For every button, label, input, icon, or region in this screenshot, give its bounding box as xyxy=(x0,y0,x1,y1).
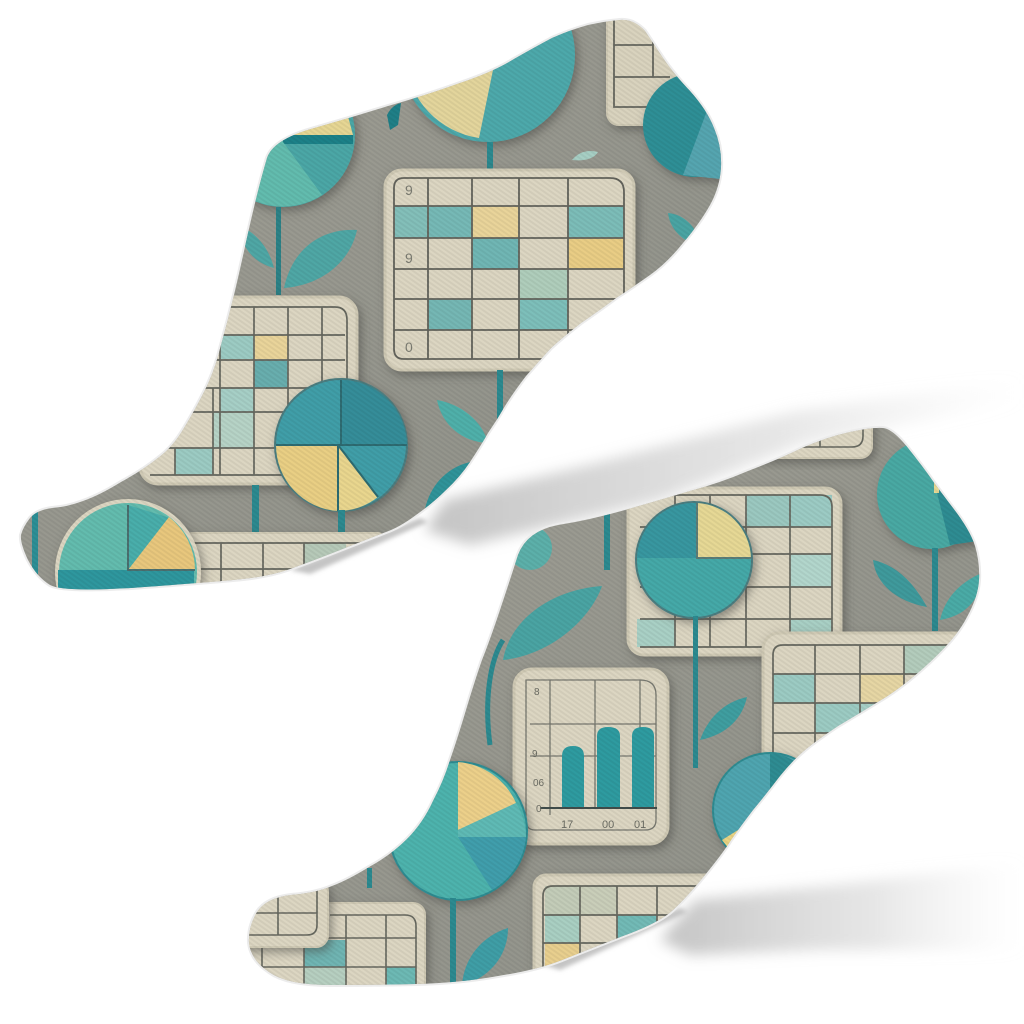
stem under centre calendar xyxy=(497,370,503,420)
floor shadow of upper sock xyxy=(290,378,1024,574)
pie chart: lower right xyxy=(713,753,827,867)
pie chart: toe xyxy=(54,498,210,590)
pie fragment at cuff xyxy=(515,530,552,570)
stem and leaves: upper left xyxy=(240,207,357,295)
calendar: bottom left xyxy=(250,903,425,1003)
leaf: right of centre calendar xyxy=(668,213,694,240)
stem: top centre pie xyxy=(487,142,493,170)
bar chart panel: 00 xyxy=(602,819,614,831)
stem: upper centre pie xyxy=(693,616,698,768)
stem at toe xyxy=(32,508,38,575)
leaf: large left xyxy=(488,586,602,745)
sock fabric xyxy=(248,428,980,985)
calendar: centre: 9 xyxy=(405,250,413,266)
stem under centre left pie xyxy=(338,510,345,532)
bar chart panel: 0 xyxy=(536,804,542,815)
pie chart: top right xyxy=(877,439,987,549)
calendar: top right corner xyxy=(607,0,687,125)
leaf: bottom centre xyxy=(462,928,508,985)
calendar: bottom xyxy=(186,532,383,584)
bar chart panel xyxy=(514,669,668,844)
floor shadow of lower sock xyxy=(540,862,1024,970)
pie chart: top centre xyxy=(410,28,582,150)
bar chart panel: 06 xyxy=(533,778,545,789)
sock outline xyxy=(21,20,721,589)
calendar: centre: 9 xyxy=(405,182,413,198)
stem: lower left pie xyxy=(450,898,456,988)
pie chart: upper left xyxy=(254,116,362,216)
stem under left calendar xyxy=(252,485,259,532)
sock outline xyxy=(249,428,979,985)
leaf smudge above centre calendar xyxy=(572,151,598,160)
calendar: upper centre xyxy=(628,488,841,655)
leaf: bottom right of upper sock xyxy=(425,462,470,508)
axis xyxy=(540,807,657,809)
bar chart panel: 8 xyxy=(534,687,540,698)
pie chart: centre left xyxy=(275,379,407,511)
small stem near toe xyxy=(367,868,372,888)
sock fabric xyxy=(20,20,722,590)
bar chart panel: 9 xyxy=(532,749,538,760)
pie chart: upper right xyxy=(640,76,722,187)
leaf: centre right xyxy=(700,697,747,740)
sock: upper left xyxy=(19,18,723,592)
bar chart panel: 01 xyxy=(634,819,646,831)
stem: top left xyxy=(604,510,610,570)
calendar: centre xyxy=(385,170,634,370)
pie chart: lower left xyxy=(389,762,527,900)
leaf: centre xyxy=(437,400,488,443)
calendar: left xyxy=(140,297,357,484)
calendar: bottom centre xyxy=(534,875,724,1000)
sock: lower right xyxy=(247,426,981,987)
bars xyxy=(562,746,584,807)
pie chart: upper centre xyxy=(636,502,752,618)
calendar: centre: 0 xyxy=(405,339,413,355)
small stem near top edge xyxy=(387,103,401,130)
axis labels: 17 xyxy=(561,819,573,831)
calendar: top xyxy=(759,428,880,468)
calendar: right xyxy=(758,630,958,788)
stem and leaves: top right xyxy=(873,548,982,631)
calendar: toe left xyxy=(230,880,328,947)
